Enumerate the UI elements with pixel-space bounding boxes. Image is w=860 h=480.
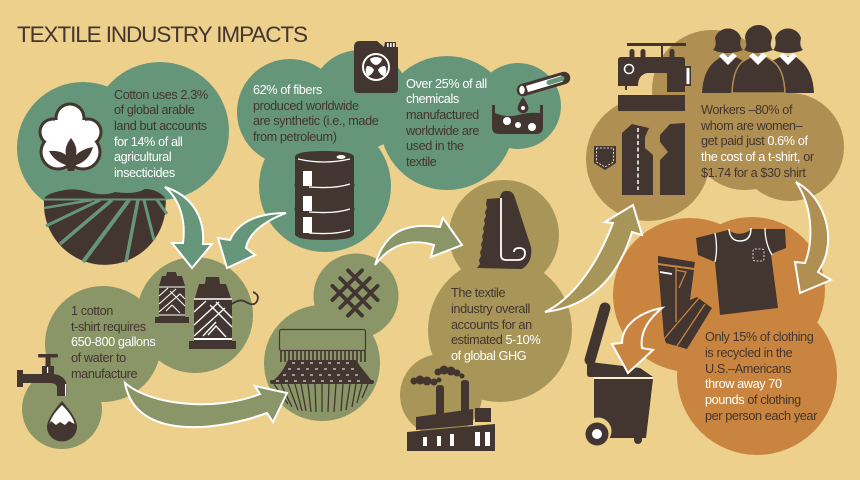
icon: small thread spool: [155, 272, 189, 323]
icon: water drop: [47, 401, 77, 442]
arrow: synthetic fibers to thread: [218, 213, 286, 268]
text: GHG statistic: estimated 5-10%: [451, 333, 540, 347]
text: chemicals statistic: worldwide are: [405, 124, 479, 138]
text: synthetic fibers statistic: 62% of fibers: [253, 83, 322, 97]
text: recycling statistic: throw away 70: [705, 377, 782, 391]
arrow: weaving to fabric: [375, 218, 462, 265]
panel: clothing waste: [613, 217, 837, 455]
text: water statistic: 1 cotton: [71, 304, 113, 318]
text: recycling statistic: Only 15% of clothing: [705, 330, 814, 344]
text: chemicals statistic: manufactured: [406, 108, 479, 122]
text: water statistic: manufacture: [71, 367, 137, 381]
text: synthetic fibers statistic: [253, 83, 379, 144]
panel: workers: [586, 25, 844, 221]
text: GHG statistic: of global GHG: [451, 349, 526, 363]
text: workers statistic: whom are women–: [700, 119, 804, 133]
icon: trousers: [658, 256, 712, 349]
text: recycling statistic: is recycled in the: [705, 346, 793, 360]
text: chemicals statistic: [405, 77, 487, 169]
icon: woven mesh: [332, 270, 378, 316]
icon: loom comb: [270, 330, 374, 412]
text: chemicals statistic: chemicals: [406, 92, 459, 106]
icon: trash bin: [584, 308, 653, 446]
icon: water tap: [17, 354, 67, 396]
panel: cotton: [17, 62, 229, 265]
icon: cotton boll: [38, 102, 102, 171]
icon: fabric roll: [477, 191, 531, 269]
text: recycling statistic: per person each year: [705, 409, 818, 423]
text: cotton statistic: agricultural: [114, 150, 171, 164]
arrow: workers to clothing: [795, 182, 831, 293]
arrow: thread to weaving: [125, 383, 287, 427]
text: cotton statistic: of global arable: [114, 103, 195, 117]
text: workers statistic: $1.74 for a $30 shirt: [701, 166, 806, 180]
text: chemicals statistic: used in the: [406, 139, 464, 153]
text: workers statistic: the cost of a t-shirt, or: [701, 150, 815, 164]
icon: garment pattern pieces: [594, 123, 685, 195]
text: water statistic: [71, 304, 155, 381]
icon: biohazard jerry can: [354, 41, 398, 93]
text: cotton statistic: insecticides: [114, 166, 175, 180]
text: water statistic: of water to: [71, 351, 126, 365]
icon: ploughed field: [44, 189, 167, 265]
text: recycling statistic: U.S.–Americans: [705, 362, 791, 376]
text: chemicals statistic: Over 25% of all: [406, 77, 487, 91]
arrow: fabric to workers: [545, 205, 642, 312]
text: workers statistic: Workers –80% of: [701, 103, 793, 117]
icon: chemical test tube and basin: [492, 78, 564, 134]
text: synthetic fibers statistic: produced worldwide: [253, 99, 359, 113]
text: cotton statistic: [114, 88, 208, 180]
icon: factory: [407, 366, 495, 451]
text: workers statistic: [700, 103, 815, 180]
text: cotton statistic: for 14% of all: [114, 135, 182, 149]
icon: three women workers: [702, 25, 814, 93]
panel: greenhouse gas: [400, 180, 572, 451]
text: water statistic: t-shirt requires: [71, 320, 146, 334]
text: GHG statistic: The textile: [451, 286, 505, 300]
text: cotton statistic: Cotton uses 2.3%: [114, 88, 208, 102]
title: TEXTILE INDUSTRY IMPACTS: [17, 22, 307, 47]
text: workers statistic: get paid just 0.6% of: [701, 134, 808, 148]
text: chemicals statistic: textile: [406, 155, 437, 169]
text: recycling statistic: [705, 330, 818, 423]
text: synthetic fibers statistic: from petroleum): [253, 130, 337, 144]
icon: large thread spool: [189, 277, 258, 349]
panel: synthetic fibers and chemicals: [237, 41, 564, 252]
panel: water use: [17, 257, 258, 449]
text: recycling statistic: pounds of clothing: [705, 393, 801, 407]
text: GHG statistic: accounts for an: [451, 318, 532, 332]
icon: oil barrel: [294, 151, 354, 240]
text: GHG statistic: industry overall: [451, 302, 530, 316]
arrow: clothing to trash: [612, 308, 662, 373]
icon: t-shirt: [696, 228, 786, 315]
text: synthetic fibers statistic: are synthetic (i.e., made: [253, 114, 379, 128]
icon: sewing machine: [618, 43, 691, 111]
panel: fabric weaving: [264, 254, 398, 421]
text: water statistic: 650-800 gallons: [71, 335, 155, 349]
arrow: cotton to thread: [165, 187, 212, 268]
text: GHG statistic: [451, 286, 540, 363]
text: cotton statistic: land but accounts: [114, 119, 207, 133]
